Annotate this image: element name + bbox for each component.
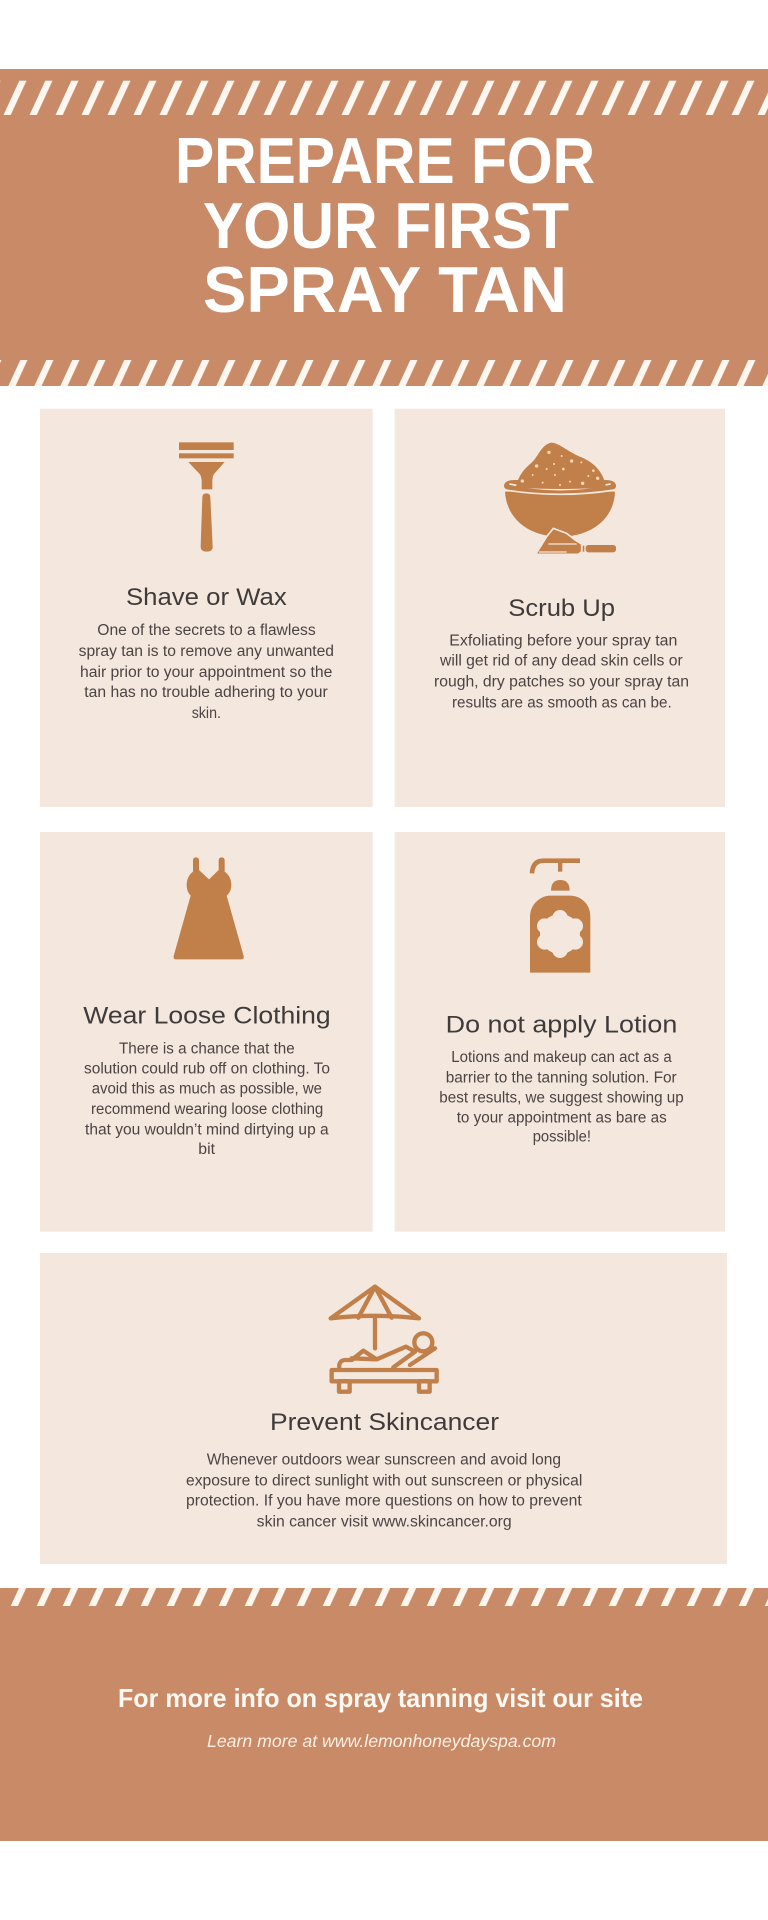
text: scrub up: rough, dry patches so your spray tan [434, 674, 689, 691]
text: do not apply lotion: barrier to the tanning solution. For [446, 1069, 677, 1086]
text: scrub up [434, 633, 689, 712]
text: wear loose clothing: avoid this as much as possible, we [92, 1081, 322, 1098]
text: do not apply lotion: Lotions and makeup can act as a [451, 1049, 672, 1066]
footer heading: For more info on spray tanning visit our site [118, 1683, 643, 1713]
icon: dress [174, 857, 244, 959]
text: shave or wax [79, 622, 334, 722]
heading: wear loose clothing: Wear Loose Clothing [83, 1002, 331, 1029]
icon: razor [179, 442, 234, 552]
text: wear loose clothing [84, 1040, 330, 1158]
title: PREPARE FOR [175, 124, 595, 197]
heading: do not apply lotion: Do not apply Lotion [446, 1011, 677, 1038]
text: prevent skincancer [186, 1451, 582, 1531]
text: do not apply lotion: possible! [533, 1129, 591, 1146]
panel: shave or wax [40, 409, 373, 807]
icon: umbrella and lounger [331, 1287, 437, 1392]
footer banner [0, 1588, 768, 1841]
text: shave or wax: skin. [192, 705, 221, 722]
panel: scrub up [395, 409, 725, 807]
text: wear loose clothing: There is a chance that the [119, 1040, 295, 1057]
icon: lotion bottle [530, 861, 590, 973]
text: shave or wax: spray tan is to remove any unwanted [79, 643, 334, 660]
text: do not apply lotion: best results, we suggest showing up [439, 1089, 684, 1106]
text: prevent skincancer: exposure to direct sunlight with out sunscreen or physical [186, 1472, 582, 1489]
heading: prevent skincancer: Prevent Skincancer [270, 1409, 499, 1436]
text: shave or wax: One of the secrets to a flawless [97, 622, 316, 639]
text: wear loose clothing: bit [198, 1141, 216, 1158]
heading: scrub up: Scrub Up [508, 595, 615, 622]
panel: wear loose clothing [40, 832, 373, 1232]
title: SPRAY TAN [203, 253, 567, 326]
panel: do not apply lotion [395, 832, 725, 1232]
text: scrub up: will get rid of any dead skin cells or [439, 653, 683, 670]
text: wear loose clothing: solution could rub off on clothing. To [84, 1061, 330, 1078]
title [175, 124, 595, 326]
text: wear loose clothing: that you wouldn’t mind dirtying up a [85, 1121, 329, 1138]
icon: scrub bowl [504, 443, 616, 554]
title: YOUR FIRST [203, 189, 569, 262]
text: scrub up: results are as smooth as can be. [452, 695, 672, 712]
text: prevent skincancer: protection. If you have more questions on how to prevent [186, 1493, 582, 1510]
text: shave or wax: tan has no trouble adhering to your [84, 684, 328, 701]
text: shave or wax: hair prior to your appointment so the [80, 664, 332, 681]
text: scrub up: Exfoliating before your spray tan [449, 633, 677, 650]
heading: shave or wax: Shave or Wax [126, 584, 287, 611]
text: prevent skincancer: skin cancer visit www.skincancer.org [257, 1514, 512, 1531]
panel: prevent skincancer [40, 1253, 727, 1564]
footer link text: Learn more at www.lemonhoneydayspa.com [207, 1731, 556, 1751]
text: do not apply lotion [439, 1049, 684, 1146]
text: do not apply lotion: to your appointment as bare as [457, 1110, 667, 1127]
text: wear loose clothing: recommend wearing loose clothing [91, 1101, 323, 1118]
header banner [0, 69, 768, 386]
text: prevent skincancer: Whenever outdoors wear sunscreen and avoid long [207, 1451, 561, 1468]
